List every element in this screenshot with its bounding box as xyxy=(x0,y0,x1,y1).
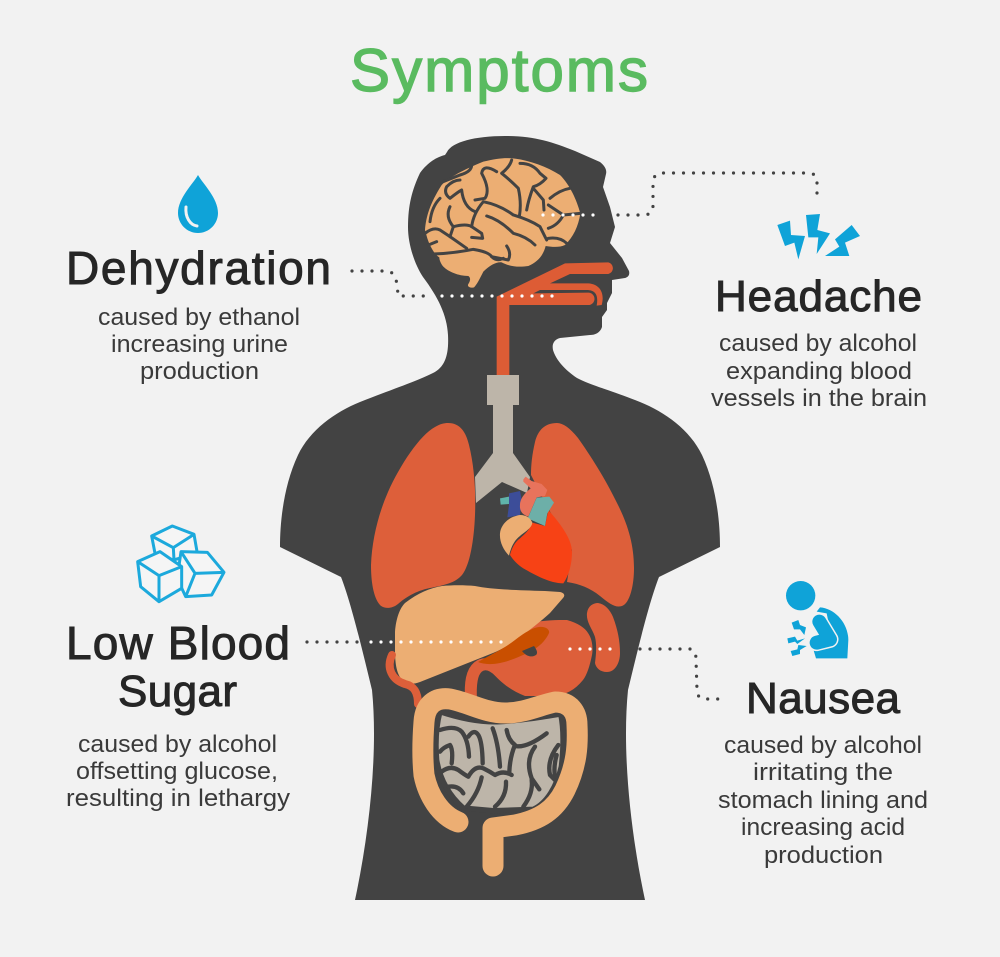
gallbladder xyxy=(478,627,549,664)
human body silhouette xyxy=(280,136,720,900)
text: nausea cause xyxy=(718,732,928,869)
trachea and bronchi xyxy=(475,375,530,503)
text: dehydration cause: increasing urine xyxy=(111,331,288,358)
text: dehydration cause xyxy=(98,304,300,385)
heading: nausea: Nausea xyxy=(746,674,901,723)
bile duct xyxy=(390,655,418,704)
dotted leader: headache xyxy=(543,173,817,215)
heading: dehydration: Dehydration xyxy=(66,242,331,294)
dotted leader: low blood sugar xyxy=(307,640,511,644)
text: headache cause: vessels in the brain xyxy=(711,385,927,412)
icon: water drop xyxy=(178,175,218,233)
brain xyxy=(425,158,580,288)
heart xyxy=(500,477,572,583)
spleen xyxy=(587,603,620,672)
title: Symptoms xyxy=(350,37,648,104)
text: headache cause: caused by alcohol xyxy=(719,330,917,357)
small intestine xyxy=(436,712,563,811)
text: headache cause xyxy=(711,330,927,412)
right lung xyxy=(531,423,634,607)
stomach xyxy=(471,620,593,700)
large intestine xyxy=(423,699,577,866)
text: low blood sugar cause: offsetting glucose, xyxy=(76,758,278,785)
text: dehydration cause: production xyxy=(140,358,259,385)
text: low blood sugar cause xyxy=(66,731,290,812)
stomach opening xyxy=(522,646,537,656)
left lung xyxy=(371,423,475,608)
heading: low blood sugar: Sugar xyxy=(118,667,237,716)
dotted leader: nausea xyxy=(570,649,727,699)
dotted leader: dehydration xyxy=(352,271,553,296)
icon: lightning bolts xyxy=(777,214,860,259)
icon: person with stomach ache xyxy=(786,581,848,658)
text: nausea cause: caused by alcohol xyxy=(724,732,922,759)
text: low blood sugar cause: caused by alcohol xyxy=(78,731,277,758)
icon: sugar cubes xyxy=(138,526,224,602)
text: dehydration cause: caused by ethanol xyxy=(98,304,300,331)
liver xyxy=(395,585,564,684)
text: headache cause: expanding blood xyxy=(726,358,912,385)
heading: low blood sugar: Low Blood xyxy=(66,617,290,669)
text: low blood sugar cause: resulting in lethargy xyxy=(66,785,290,812)
text: nausea cause: irritating the xyxy=(753,759,893,786)
heading: low blood sugar xyxy=(66,617,290,716)
heading: headache: Headache xyxy=(715,272,922,321)
text: nausea cause: increasing acid xyxy=(741,814,905,841)
text: nausea cause: production xyxy=(764,842,883,869)
esophagus and mouth xyxy=(497,262,613,375)
text: nausea cause: stomach lining and xyxy=(718,787,928,814)
